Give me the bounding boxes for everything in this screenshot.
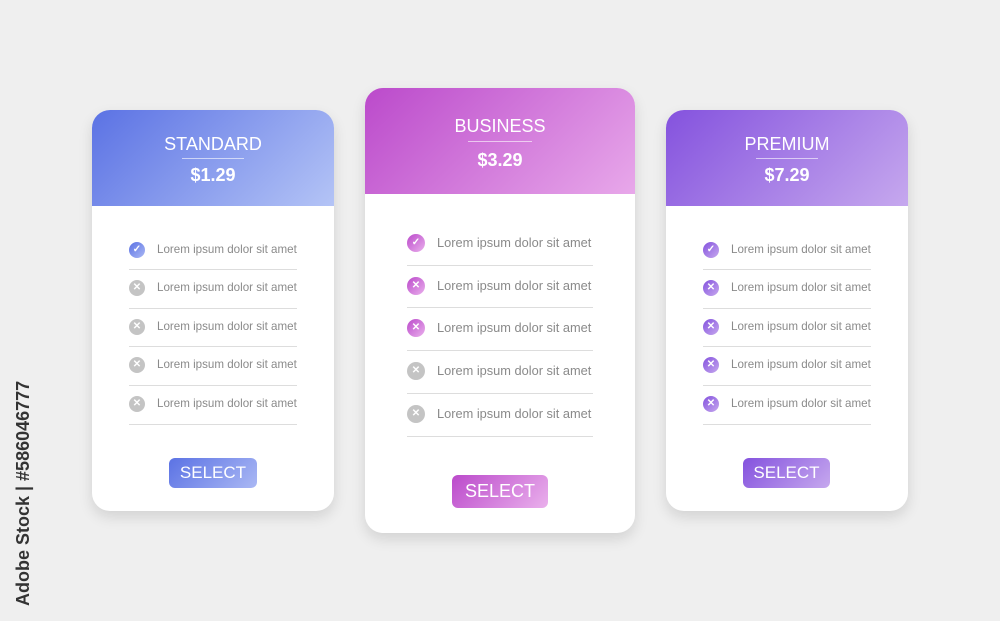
header: standard: $1.29 <box>190 165 236 185</box>
features: ✓ <box>133 244 141 255</box>
header: premium: PREMIUM <box>744 134 830 154</box>
features: ✕ <box>412 408 420 419</box>
features: Lorem ipsum dolor sit amet <box>157 281 297 294</box>
features: ✕ <box>707 359 715 370</box>
features: ✕ <box>133 398 141 409</box>
features <box>703 242 871 425</box>
features: ✕ <box>133 359 141 370</box>
features: Lorem ipsum dolor sit amet <box>731 320 871 333</box>
features: ✕ <box>412 322 420 333</box>
header: business: $3.29 <box>477 150 523 170</box>
features <box>129 242 297 425</box>
features <box>407 234 593 437</box>
features: Lorem ipsum dolor sit amet <box>731 358 871 371</box>
features: Lorem ipsum dolor sit amet <box>437 235 591 250</box>
features: ✕ <box>707 398 715 409</box>
header: premium <box>666 110 908 206</box>
features: ✓ <box>412 237 420 248</box>
features: ✓ <box>707 244 715 255</box>
header: business <box>365 88 635 194</box>
button: SELECT <box>465 481 535 501</box>
features: Lorem ipsum dolor sit amet <box>157 243 297 256</box>
features: Lorem ipsum dolor sit amet <box>437 363 591 378</box>
features: Lorem ipsum dolor sit amet <box>157 397 297 410</box>
features: Lorem ipsum dolor sit amet <box>437 278 591 293</box>
header: business: BUSINESS <box>454 116 546 136</box>
header: standard: STANDARD <box>164 134 262 154</box>
side label: Adobe Stock | #586046777 <box>13 381 33 606</box>
button: SELECT <box>753 463 820 482</box>
button <box>743 458 830 488</box>
features: Lorem ipsum dolor sit amet <box>731 281 871 294</box>
features: Lorem ipsum dolor sit amet <box>731 397 871 410</box>
panel: premium <box>666 110 908 511</box>
features: ✕ <box>412 280 420 291</box>
features: ✕ <box>133 321 141 332</box>
features: Lorem ipsum dolor sit amet <box>437 320 591 335</box>
header: standard <box>92 110 334 206</box>
features: Lorem ipsum dolor sit amet <box>157 320 297 333</box>
button: SELECT <box>180 463 246 482</box>
features: ✕ <box>707 321 715 332</box>
features: ✕ <box>412 365 420 376</box>
button <box>169 458 257 488</box>
features: ✕ <box>133 282 141 293</box>
features: ✕ <box>707 282 715 293</box>
header: premium: $7.29 <box>764 165 810 185</box>
features: Lorem ipsum dolor sit amet <box>157 358 297 371</box>
features: Lorem ipsum dolor sit amet <box>437 406 591 421</box>
button <box>452 475 548 508</box>
panel: business <box>365 88 635 533</box>
panel: standard <box>92 110 334 511</box>
features: Lorem ipsum dolor sit amet <box>731 243 871 256</box>
